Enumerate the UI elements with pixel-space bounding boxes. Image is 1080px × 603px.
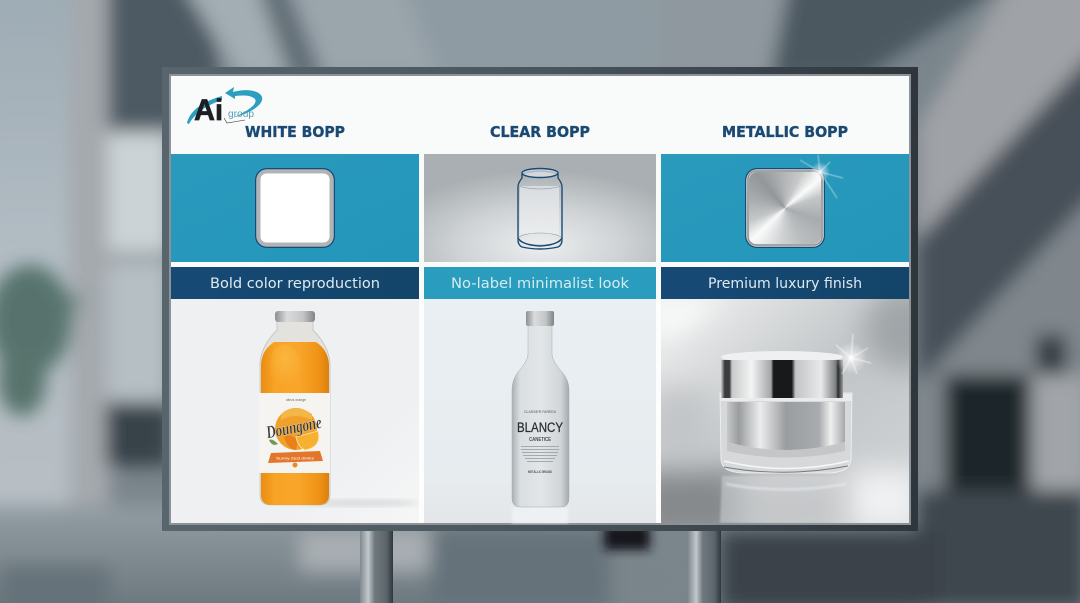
bottle label text [517,410,563,474]
product photo: orange juice bottle [171,299,420,523]
swatch panel: white [171,154,419,262]
bottle label text: CANETICE [529,437,552,443]
swatch panel: metallic [661,154,909,262]
icon: sparkle [800,155,843,198]
caption bar: bold color [171,267,419,299]
board panel [171,76,945,540]
jar metallic body [727,402,845,450]
bottle label [259,393,330,473]
swatch panel: clear [424,154,656,262]
heading: White BOPP: WHITE BOPP [245,123,345,141]
board frame [162,67,918,531]
bottle label text: METALLIC BRAND [528,470,552,474]
stand poles [360,528,721,603]
heading: Metallic BOPP: METALLIC BOPP [722,123,848,141]
icon: metallic square [745,168,825,248]
product photo: clear glass bottle [419,299,661,523]
bottle label: citrus orange [286,398,306,402]
bottle label text: BLANCY [517,420,563,435]
caption bar: no-label: No-label minimalist look [451,276,630,292]
glass body [512,325,569,507]
jar base glass [720,393,852,473]
bottle label: Doungone [264,412,323,442]
heading: Clear BOPP: CLEAR BOPP [490,123,590,141]
metal screw cap [526,311,554,326]
caption bar: premium: Premium luxury finish [708,276,862,292]
caption bar: premium [661,267,909,299]
logo: Ai group: group [228,108,254,120]
bottle label text: CLASSIER FAREEA [524,410,557,414]
jar sparkle [835,334,871,374]
jar reflection [720,476,850,523]
icon: clear can [518,168,562,249]
icon: white film square [255,168,335,248]
logo: Ai group [187,87,262,127]
bottle label: Sunny Zest drinks [276,456,314,460]
product photo: metallic cream jar [661,299,909,523]
caption bar: no-label [424,267,656,299]
jar lid [721,351,843,360]
caption bar: bold color: Bold color reproduction [210,276,380,292]
logo: Ai group: Ai [194,94,223,127]
